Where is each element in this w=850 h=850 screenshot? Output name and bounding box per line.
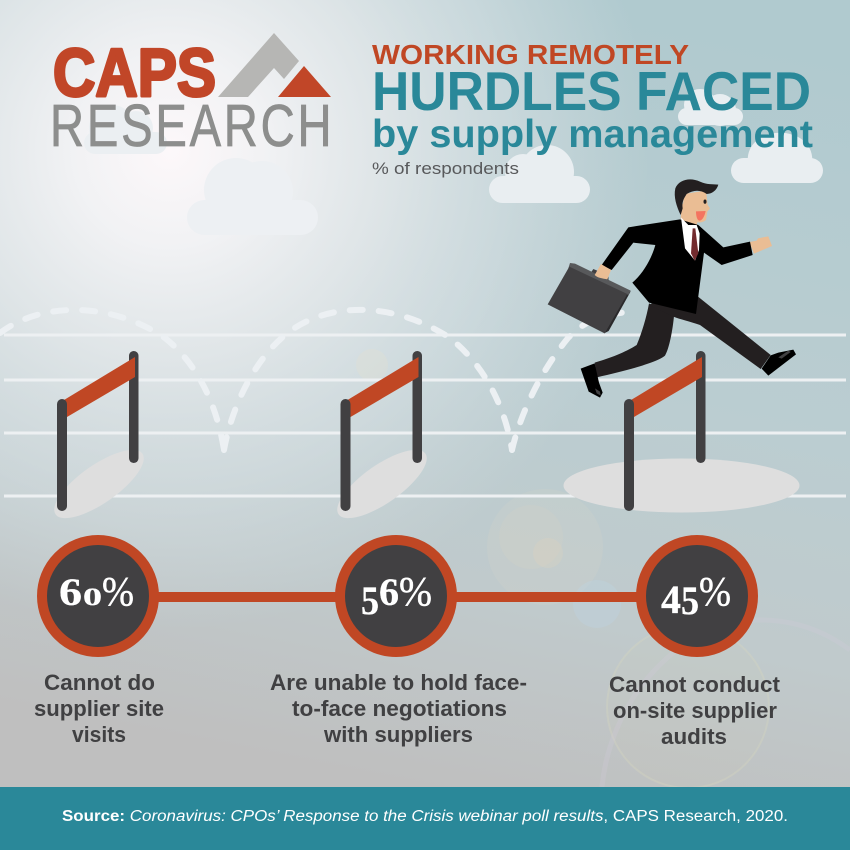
label: unable to hold face-to-face negotiations: Are unable to hold face- bbox=[270, 670, 527, 695]
hurdle 2 bbox=[328, 351, 436, 530]
stat: 60% bbox=[42, 540, 154, 652]
back hand bbox=[595, 264, 611, 279]
lens flares bbox=[356, 349, 850, 788]
stat ring 56% bbox=[340, 540, 452, 652]
label: cannot do supplier site visits: visits bbox=[72, 722, 126, 747]
jacket bbox=[602, 219, 753, 314]
stat value 56% bbox=[361, 568, 432, 623]
briefcase top bbox=[568, 263, 631, 295]
briefcase body bbox=[548, 267, 627, 333]
label: cannot conduct on-site supplier audits: on-site supplier bbox=[613, 698, 777, 723]
stat value 56%: 5 bbox=[361, 578, 379, 623]
neck bbox=[681, 203, 698, 227]
hurdle 3 front post bbox=[624, 399, 634, 511]
businessman jumping with briefcase bbox=[548, 179, 796, 398]
logo wordmark: RESEARCH: RESEARCH bbox=[50, 94, 332, 159]
eye bbox=[703, 199, 706, 204]
logo wordmark: CAPS: CAPS bbox=[53, 35, 216, 111]
cloud: right bbox=[731, 133, 823, 183]
hurdle 3 shadow bbox=[564, 458, 800, 512]
logo mountain: gray peak bbox=[218, 33, 299, 97]
label: cannot do supplier site visits bbox=[34, 670, 164, 747]
stat value 56%: % bbox=[399, 568, 432, 614]
head bbox=[683, 191, 710, 222]
cloud: center bbox=[489, 145, 590, 203]
stat ring 45% bbox=[641, 540, 753, 652]
logo: CAPS Research bbox=[50, 33, 332, 159]
back leg bbox=[595, 303, 674, 377]
front hand bbox=[749, 236, 772, 254]
hurdle 3 bbox=[564, 351, 800, 512]
heading bbox=[372, 39, 813, 178]
label: cannot conduct on-site supplier audits: audits bbox=[661, 724, 727, 749]
connector between stats bbox=[155, 592, 645, 602]
briefcase side bbox=[604, 291, 631, 333]
hurdle 1 front post bbox=[57, 399, 67, 511]
hurdle 1 bar bbox=[64, 357, 135, 417]
hurdle 2 back post bbox=[412, 351, 422, 463]
stat value 45%: % bbox=[699, 568, 731, 614]
stat value 45%: 5 bbox=[681, 578, 699, 623]
label: cannot conduct on-site supplier audits: Cannot conduct bbox=[609, 672, 781, 697]
front leg bbox=[649, 295, 771, 369]
hurdle 1 shadow bbox=[45, 438, 153, 530]
label: unable to hold face-to-face negotiations bbox=[270, 670, 527, 747]
back shoe bbox=[581, 363, 603, 398]
hurdle 2 shadow bbox=[328, 438, 436, 530]
shoe highlights bbox=[595, 351, 791, 396]
stat value 56%: 6 bbox=[379, 571, 399, 614]
stat value 45%: 4 bbox=[661, 577, 681, 622]
stat value 60%: 6 bbox=[59, 571, 82, 614]
cloud: behind heading bbox=[678, 89, 743, 126]
subheading: % of respondents bbox=[372, 159, 519, 178]
mouth bbox=[696, 211, 706, 221]
hurdle 1 back post bbox=[129, 351, 138, 463]
source citation: Source: Coronavirus: CPOs’ Response to the Crisis webinar poll results , CAPS Research, 2020. bbox=[62, 808, 788, 825]
dashed jump path bbox=[0, 310, 632, 450]
cloud: behind logo bbox=[84, 105, 167, 154]
hurdle 3 bar bbox=[631, 357, 702, 417]
front shoe bbox=[762, 350, 796, 376]
heading line: by supply management: by supply management bbox=[372, 113, 813, 156]
label: cannot do supplier site visits: Cannot do bbox=[44, 670, 155, 695]
cloud: large left bbox=[187, 158, 318, 235]
shirt bbox=[681, 217, 700, 261]
stat value 45% bbox=[661, 568, 731, 623]
footer band bbox=[0, 787, 850, 850]
label: cannot do supplier site visits: supplier site bbox=[34, 696, 164, 721]
stat value 60% bbox=[59, 568, 134, 614]
label: unable to hold face-to-face negotiations: to-face negotiations bbox=[292, 696, 507, 721]
stat: 45% bbox=[641, 540, 753, 652]
tie bbox=[691, 228, 698, 261]
heading line: hurdles faced: HURDLES FACED bbox=[372, 61, 811, 122]
running track lines bbox=[4, 334, 846, 498]
hurdle 2 bar bbox=[348, 357, 418, 417]
stat ring 60% bbox=[42, 540, 154, 652]
heading line: working remotely: WORKING REMOTELY bbox=[372, 39, 689, 70]
logo mountain: red peak bbox=[278, 66, 331, 97]
hurdle 2 front post bbox=[340, 399, 350, 511]
briefcase handle bbox=[590, 269, 609, 282]
hurdle 3 back post bbox=[696, 351, 706, 463]
stat value 60%: % bbox=[102, 568, 134, 614]
hurdle 1 bbox=[45, 351, 153, 530]
label: unable to hold face-to-face negotiations: with suppliers bbox=[323, 722, 473, 747]
stat: 56% bbox=[340, 540, 452, 652]
hair bbox=[675, 179, 718, 215]
label: cannot conduct on-site supplier audits bbox=[609, 672, 781, 749]
stat value 60%: 0 bbox=[83, 584, 102, 611]
